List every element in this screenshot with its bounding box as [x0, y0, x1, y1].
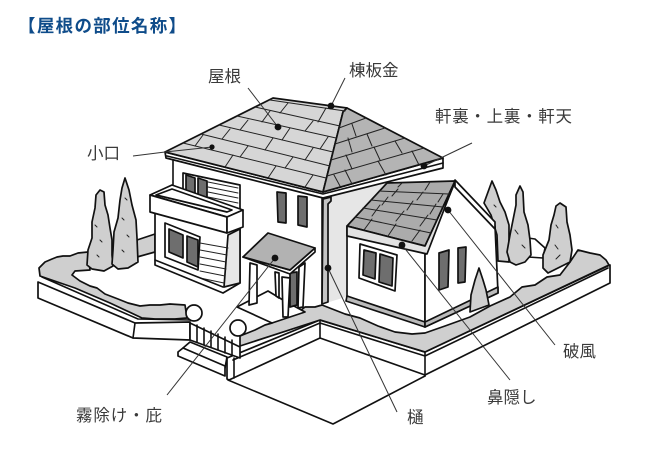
callout: 鼻隠し	[399, 242, 536, 407]
callout: 小口: 小口	[87, 144, 120, 163]
callout: 屋根: 屋根	[208, 67, 241, 86]
main roof fascia	[165, 152, 443, 198]
callout: 軒裏・上裏・軒天: 軒裏・上裏・軒天	[435, 107, 572, 126]
trees	[87, 178, 572, 273]
illustration: house and garden	[38, 98, 610, 424]
balcony and lower bay	[150, 173, 243, 293]
wing roof	[347, 181, 455, 254]
callout: 霧除け・庇: 霧除け・庇	[76, 406, 162, 425]
callout: 小口	[87, 144, 215, 163]
callout: 破風: 破風	[563, 342, 596, 361]
porch	[237, 233, 315, 323]
callout: 棟板金	[328, 61, 398, 109]
callout: 霧除け・庇	[76, 255, 278, 425]
fence and stairs	[178, 305, 246, 376]
callout: 軒裏・上裏・軒天	[421, 107, 572, 169]
callout: 鼻隠し: 鼻隠し	[487, 388, 536, 407]
callout: 屋根	[208, 67, 281, 130]
downpipe gutter	[322, 197, 331, 304]
garden base platform	[38, 265, 610, 424]
title: 【屋根の部位名称】	[18, 16, 186, 36]
callout: 樋: 樋	[407, 408, 424, 427]
callout: 棟板金: 棟板金	[349, 61, 398, 80]
wing building	[346, 180, 498, 327]
wall windows	[277, 192, 307, 227]
hedges	[39, 234, 609, 352]
main roof	[165, 98, 443, 192]
callout: 樋	[325, 265, 424, 427]
callout: 破風	[445, 207, 596, 361]
main wall	[173, 158, 387, 305]
